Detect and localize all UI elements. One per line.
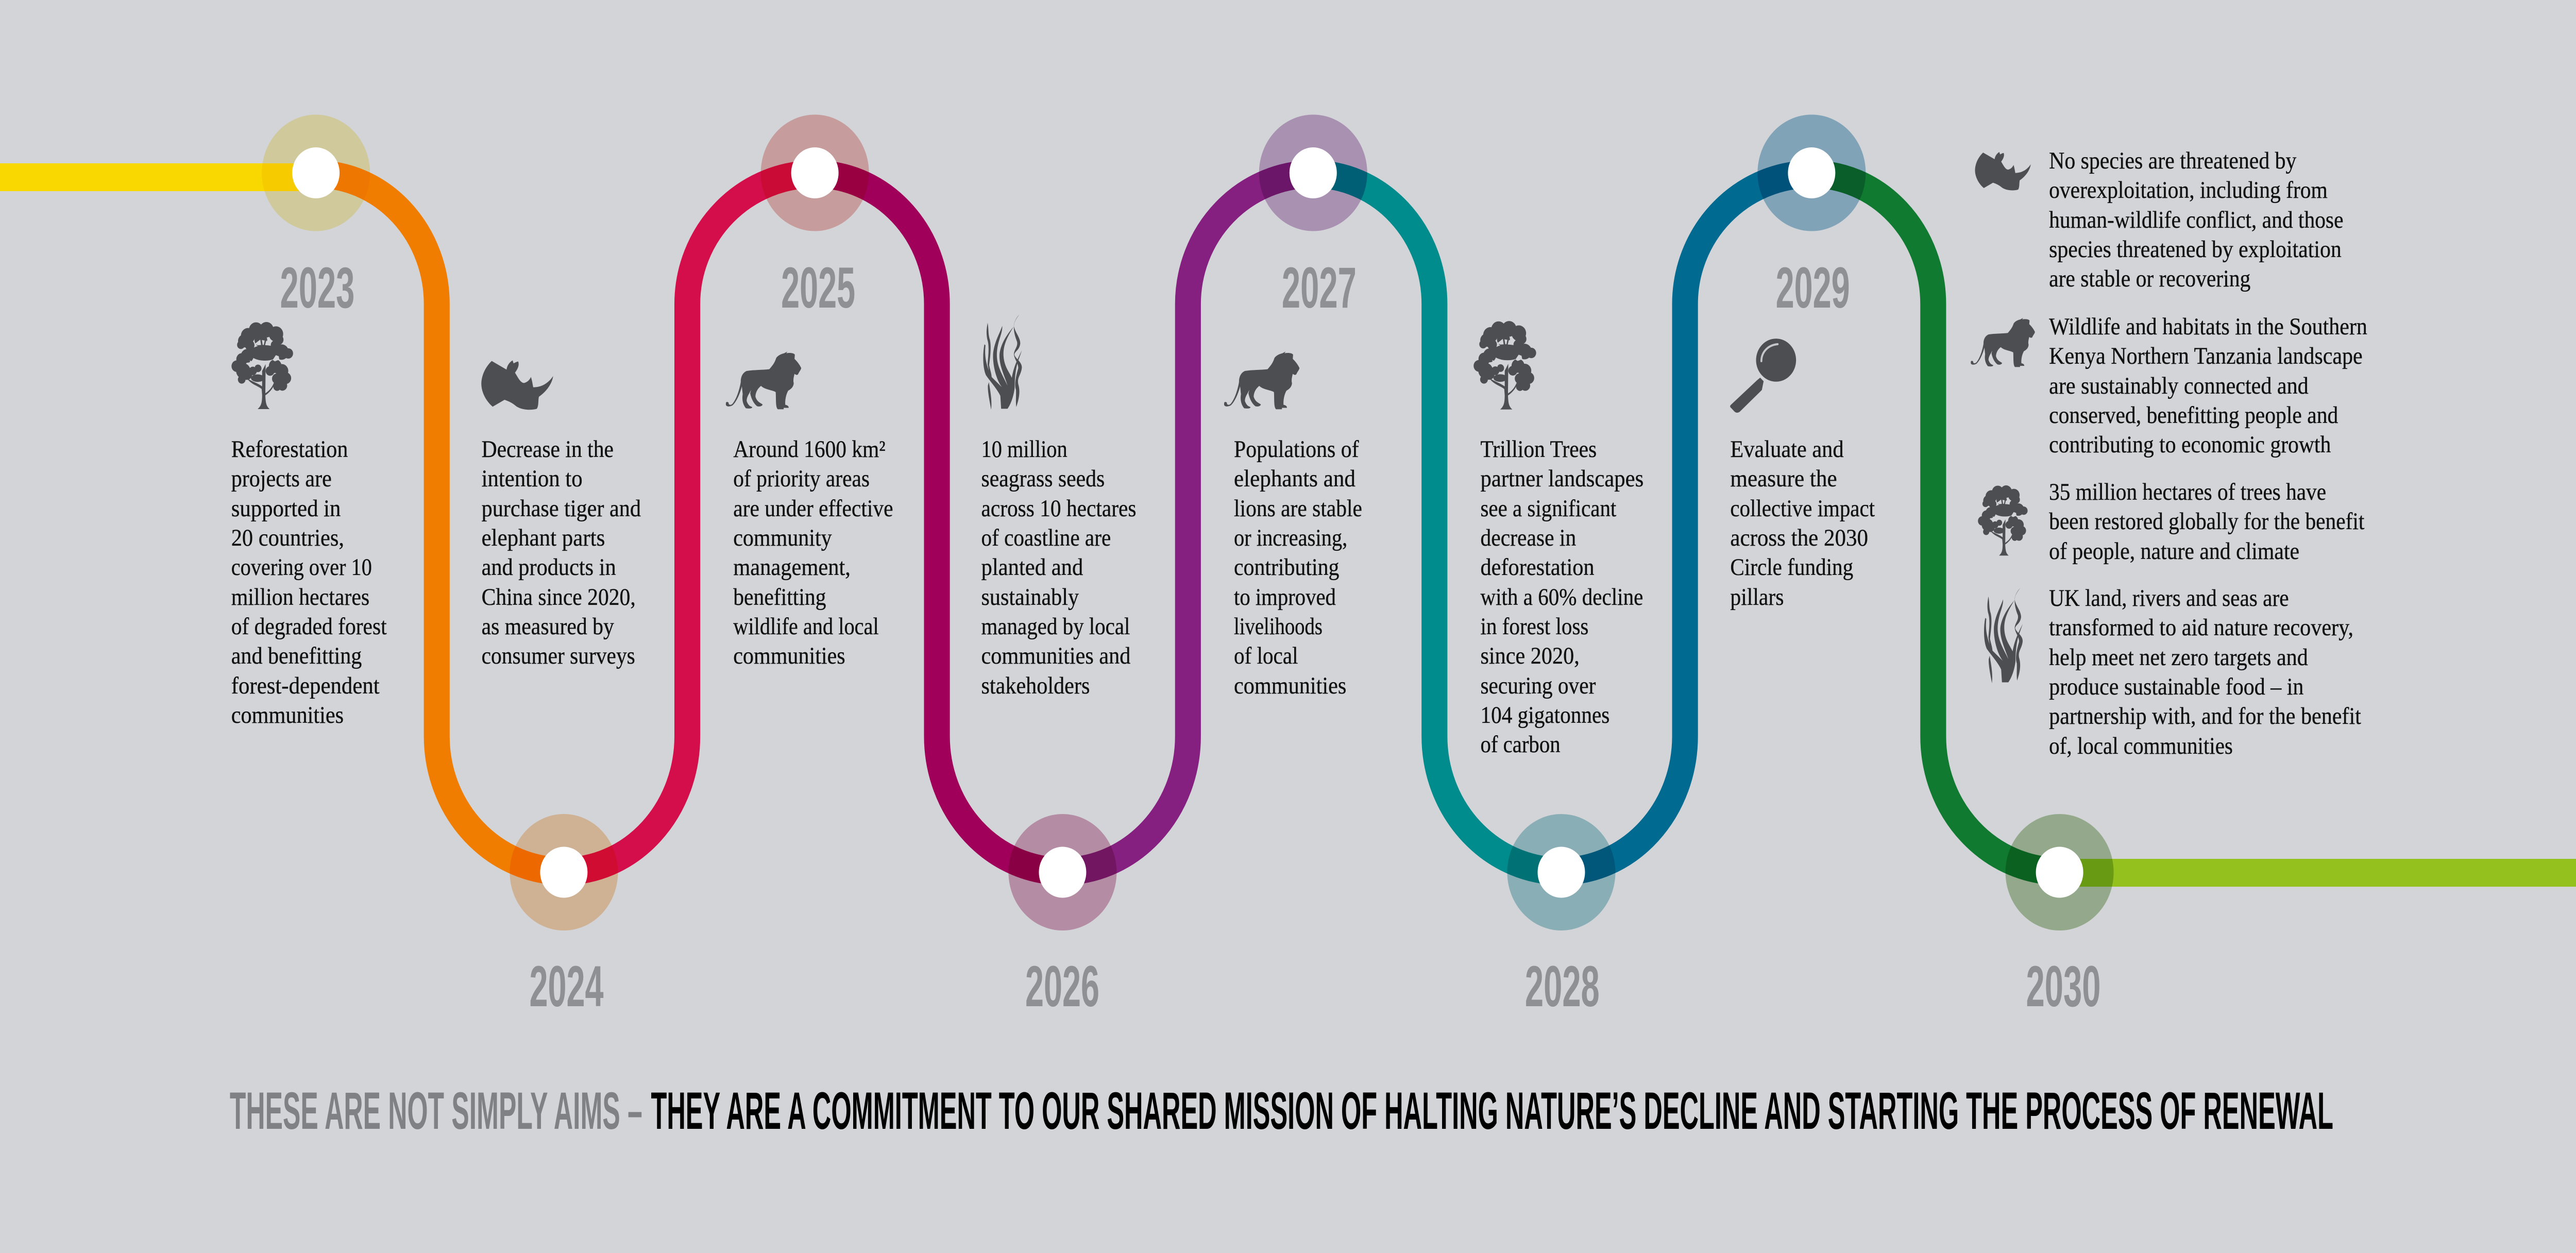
icon: tree 2030	[1978, 485, 2028, 555]
text: deforestation: Trillion Trees	[1480, 436, 1597, 462]
text: deforestation	[1480, 436, 1643, 757]
text: deforestation: since 2020,	[1480, 642, 1580, 669]
text: UK land 2030: partnership with, and for the benefit	[2049, 703, 2361, 729]
text: reforestation: Reforestation	[231, 436, 348, 462]
text: UK land 2030: transformed to aid nature recovery,	[2049, 614, 2353, 640]
year 2025: 2025	[781, 255, 855, 320]
year 2030: 2030	[2026, 954, 2100, 1019]
text: UK land 2030: UK land, rivers and seas are	[2049, 585, 2289, 611]
year 2028: 2028	[1525, 954, 1600, 1019]
text: deforestation: deforestation	[1480, 554, 1595, 580]
text: deforestation: decrease in	[1480, 524, 1576, 551]
text: species 2030: human-wildlife conflict, and those	[2049, 207, 2343, 233]
text: species 2030: are stable or recovering	[2049, 265, 2250, 292]
text: trees 2030: been restored globally for the benefit	[2049, 508, 2365, 534]
headline	[230, 1081, 2333, 1140]
text: community management: of priority areas	[733, 465, 870, 492]
line: 2026 to 2027 purple	[1062, 174, 1313, 871]
text: wildlife 2030: contributing to economic growth	[2049, 431, 2331, 458]
text: seagrass: stakeholders	[981, 672, 1090, 699]
node 2026 halo	[1008, 814, 1116, 930]
text: reforestation: covering over 10	[231, 554, 372, 580]
text: seagrass: managed by local	[981, 613, 1130, 639]
icon: lion 2027	[1224, 351, 1299, 409]
text: community management: Around 1600 km²	[733, 436, 886, 462]
text: evaluation: pillars	[1730, 584, 1784, 610]
headline black part: THEY ARE A COMMITMENT TO OUR SHARED MISSION OF HALTING NATURE’S DECLINE AND STARTING THE PROCESS OF RENEWAL	[651, 1081, 2333, 1140]
text: community management: management,	[733, 554, 851, 580]
year 2029: 2029	[1776, 255, 1850, 320]
text: wildlife 2030: are sustainably connected and	[2049, 372, 2309, 399]
node 2027 halo	[1259, 114, 1367, 231]
text: wildlife 2030: conserved, benefitting people and	[2049, 402, 2338, 428]
text: UK land 2030: of, local communities	[2049, 733, 2233, 759]
text: evaluation: Evaluate and	[1730, 436, 1844, 462]
text: wildlife 2030	[2049, 313, 2367, 458]
text: reforestation	[231, 436, 387, 728]
node 2023 halo	[262, 114, 370, 231]
text: seagrass: planted and	[981, 554, 1083, 580]
text: reforestation: communities	[231, 702, 344, 728]
text: deforestation: securing over	[1480, 672, 1596, 699]
text: species 2030	[2049, 147, 2343, 292]
icon: lion 2025	[726, 351, 801, 409]
text: elephants and lions: contributing	[1234, 554, 1339, 580]
text: elephants and lions: elephants and	[1234, 465, 1355, 492]
line: end bar light green	[2060, 859, 2576, 887]
text: elephants and lions: lions are stable	[1234, 495, 1362, 521]
text: community management: benefitting	[733, 584, 826, 610]
text: deforestation: in forest loss	[1480, 613, 1588, 639]
text: UK land 2030: produce sustainable food – in	[2049, 673, 2303, 700]
text: elephants and lions: of local	[1234, 642, 1298, 669]
text: elephants and lions: Populations of	[1234, 436, 1359, 462]
node 2030 halo	[2006, 814, 2114, 930]
text: trees 2030: 35 million hectares of trees have	[2049, 479, 2326, 505]
text: deforestation: with a 60% decline	[1480, 584, 1643, 610]
text: consumer demand: and products in	[482, 554, 616, 580]
text: evaluation	[1730, 436, 1875, 610]
line: 2023 to 2024 orange	[316, 174, 564, 871]
text: seagrass: communities and	[981, 642, 1130, 669]
icon: tree 2028	[1473, 321, 1536, 410]
node 2025 halo	[761, 114, 869, 231]
text: reforestation: million hectares	[231, 584, 369, 610]
text: consumer demand: purchase tiger and	[482, 495, 641, 521]
text: seagrass: seagrass seeds	[981, 465, 1105, 492]
text: elephants and lions: to improved	[1234, 584, 1336, 610]
line: 2029 to 2030 green	[1811, 174, 2060, 871]
icon: rhino 2030	[1975, 152, 2031, 191]
text: wildlife 2030: Kenya Northern Tanzania landscape	[2049, 343, 2363, 369]
line: 2025 to 2026 magenta	[815, 174, 1062, 871]
text: evaluation: collective impact	[1730, 495, 1875, 521]
node 2029 halo	[1757, 114, 1866, 231]
timeline path	[0, 114, 2576, 930]
text: UK land 2030: help meet net zero targets and	[2049, 644, 2308, 670]
text: elephants and lions: livelihoods	[1234, 613, 1323, 639]
text: species 2030: species threatened by exploitation	[2049, 236, 2342, 262]
text: deforestation: partner landscapes	[1480, 465, 1643, 492]
text: evaluation: across the 2030	[1730, 524, 1868, 551]
line: 2028 to 2029 blue	[1561, 174, 1811, 871]
icon: rhino 2024	[481, 360, 553, 410]
text: community management: communities	[733, 642, 845, 669]
node 2024 halo	[510, 814, 618, 930]
text: elephants and lions	[1234, 436, 1362, 699]
line: 2024 to 2025 red	[564, 174, 815, 871]
text: seagrass	[981, 436, 1136, 699]
text: deforestation: of carbon	[1480, 731, 1561, 757]
node dots	[292, 147, 2083, 898]
text: elephants and lions: or increasing,	[1234, 524, 1347, 551]
text: community management: wildlife and local	[733, 613, 879, 639]
node 2028 halo	[1507, 814, 1615, 930]
text: reforestation: projects are	[231, 465, 332, 492]
icon: seagrass 2030	[1984, 588, 2023, 683]
text: wildlife 2030: Wildlife and habitats in the Southern	[2049, 313, 2367, 340]
headline grey part: THESE ARE NOT SIMPLY AIMS –	[230, 1081, 642, 1140]
icon: lion 2030	[1971, 318, 2035, 367]
text: evaluation: Circle funding	[1730, 554, 1853, 580]
text: seagrass: of coastline are	[981, 524, 1111, 551]
icon: seagrass 2026	[983, 314, 1022, 410]
text: seagrass: 10 million	[981, 436, 1067, 462]
text: consumer demand: intention to	[482, 465, 583, 492]
text: deforestation: 104 gigatonnes	[1480, 702, 1609, 728]
year 2023: 2023	[280, 255, 354, 320]
year 2027: 2027	[1282, 255, 1357, 320]
year 2026: 2026	[1025, 954, 1099, 1019]
text: seagrass: sustainably	[981, 584, 1079, 610]
text: reforestation: forest-dependent	[231, 672, 380, 699]
text: consumer demand: as measured by	[482, 613, 614, 639]
text: community management: are under effective	[733, 495, 893, 521]
text: consumer demand	[482, 436, 641, 669]
text: community management: community	[733, 524, 832, 551]
text: elephants and lions: communities	[1234, 672, 1346, 699]
text: species 2030: overexploitation, including from	[2049, 177, 2328, 203]
year 2024: 2024	[529, 954, 603, 1019]
text: reforestation: of degraded forest	[231, 613, 387, 639]
text: UK land 2030	[2049, 585, 2361, 759]
text: deforestation: see a significant	[1480, 495, 1617, 521]
line: 2027 to 2028 teal	[1313, 174, 1561, 871]
text: trees 2030: of people, nature and climate	[2049, 538, 2299, 564]
text: species 2030: No species are threatened by	[2049, 147, 2297, 174]
text: consumer demand: China since 2020,	[482, 584, 636, 610]
text: consumer demand: consumer surveys	[482, 642, 635, 669]
text: trees 2030	[2049, 479, 2365, 564]
text: seagrass: across 10 hectares	[981, 495, 1136, 521]
line: start bar yellow	[0, 163, 316, 191]
icon: tree 2023	[231, 322, 293, 409]
text: reforestation: supported in	[231, 495, 341, 521]
text: reforestation: 20 countries,	[231, 524, 344, 551]
text: evaluation: measure the	[1730, 465, 1837, 492]
text: reforestation: and benefitting	[231, 642, 362, 669]
text: consumer demand: elephant parts	[482, 524, 605, 551]
text: community management	[733, 436, 893, 669]
icon: magnifying glass 2029	[1730, 338, 1796, 413]
text: consumer demand: Decrease in the	[482, 436, 614, 462]
